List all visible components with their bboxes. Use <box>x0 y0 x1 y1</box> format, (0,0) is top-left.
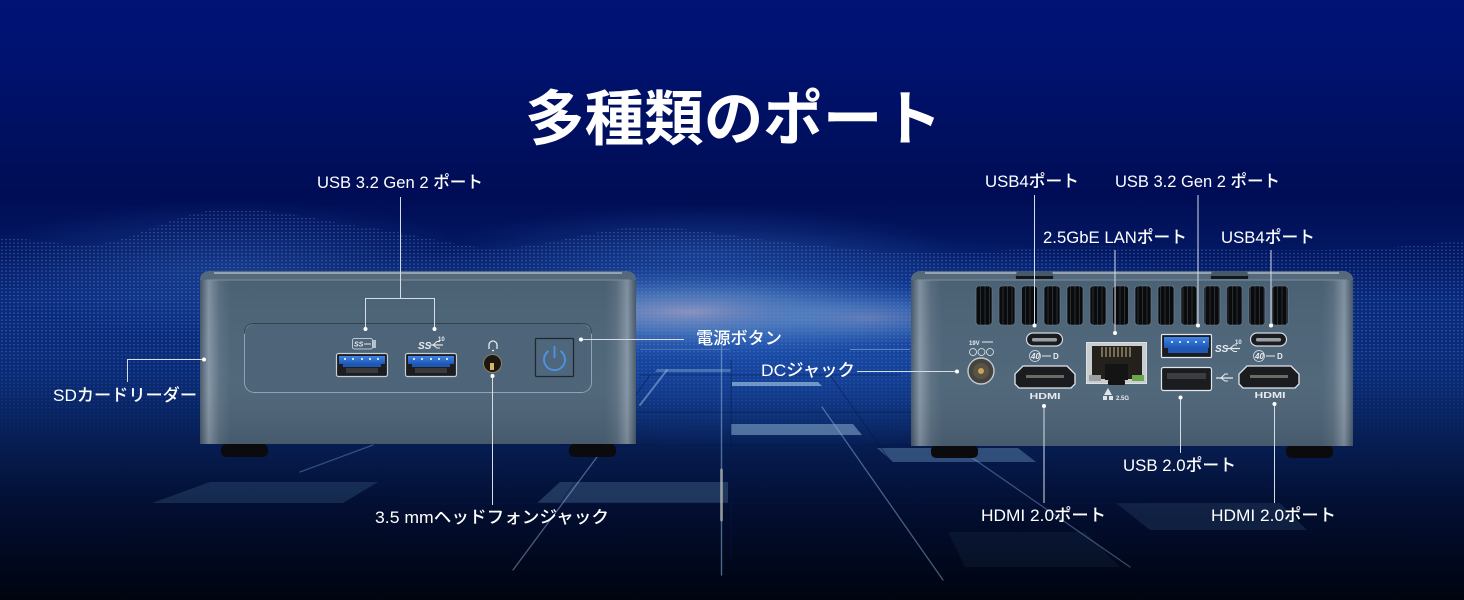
feet <box>221 444 616 457</box>
callout: HDMI right: HDMI 2.0ポート <box>1211 506 1336 525</box>
floor tiles <box>152 349 1307 567</box>
callout: DC jack: DCジャック <box>761 361 855 380</box>
port: LAN: 2.5G <box>1116 396 1129 402</box>
port: HDMI right: HDMI <box>1254 391 1286 400</box>
title: 多種類のポート <box>525 86 942 153</box>
port: USB-C left <box>1026 333 1062 362</box>
icon: SS battery <box>352 338 376 349</box>
port: USB-A 1 <box>336 354 388 376</box>
front panel <box>244 324 592 392</box>
callout: 2.5GbE LAN: 2.5GbE LANポート <box>1043 228 1187 247</box>
icon: SS 10: SS <box>418 341 432 352</box>
callout: USB4 right: USB4ポート <box>1221 228 1315 247</box>
port: USB 3 rear: 10 <box>1235 340 1242 346</box>
icon: SS battery: SS <box>354 342 364 348</box>
callout: front USB 3.2 Gen 2 <box>317 173 483 331</box>
light rays <box>300 345 1130 580</box>
device: rear view <box>911 271 1353 458</box>
port: DC jack: 19V <box>969 341 980 347</box>
port: HDMI left <box>1015 366 1075 401</box>
callout: USB4 left <box>985 172 1079 328</box>
callout: headphone jack: 3.5 mmヘッドフォンジャック <box>375 508 609 527</box>
callout: USB4 left: USB4ポート <box>985 172 1079 191</box>
feet <box>931 445 1333 458</box>
port: HDMI left: HDMI <box>1030 392 1060 401</box>
port: USB-C left: 40 <box>1030 352 1040 361</box>
port: USB-C left: D <box>1053 352 1059 361</box>
port: USB 3 rear <box>1162 334 1242 358</box>
callout: SD card reader <box>53 358 206 405</box>
callout: headphone jack <box>375 374 609 527</box>
port: USB 3 rear: SS <box>1215 344 1229 355</box>
port: USB-C right: 40 <box>1254 352 1264 361</box>
port: HDMI right <box>1239 366 1299 400</box>
port: USB-C right <box>1250 333 1286 362</box>
callout: SD card reader: SDカードリーダー <box>53 385 197 405</box>
power button <box>536 338 574 376</box>
callout: USB 2.0: USB 2.0ポート <box>1123 456 1236 475</box>
callout: USB4 right <box>1221 228 1315 328</box>
callout: power button: 電源ボタン <box>696 329 782 348</box>
front body <box>200 271 636 444</box>
rear body <box>911 271 1353 446</box>
port: DC jack <box>968 341 994 384</box>
callout: DC jack <box>761 361 959 380</box>
port: headphone jack <box>484 354 502 372</box>
icon: SS 10 <box>418 337 445 352</box>
port: LAN <box>1086 342 1146 402</box>
callout: rear USB 3.2 Gen 2: USB 3.2 Gen 2 ポート <box>1115 172 1280 191</box>
icon: headphone <box>489 341 497 350</box>
callout: HDMI left: HDMI 2.0ポート <box>981 506 1106 525</box>
callout: HDMI right <box>1211 402 1336 525</box>
callout: HDMI left <box>981 404 1106 525</box>
port: USB-C right: D <box>1277 352 1283 361</box>
vents <box>976 286 1288 325</box>
callout: USB 2.0 <box>1123 396 1236 475</box>
icon: SS 10: 10 <box>438 337 445 343</box>
port: USB-A 2 <box>406 354 456 376</box>
device: front view <box>200 271 636 457</box>
callout: front USB 3.2 Gen 2: USB 3.2 Gen 2 ポート <box>317 173 483 192</box>
callout: 2.5GbE LAN <box>1043 228 1187 335</box>
callout: power button <box>579 329 782 348</box>
callout: rear USB 3.2 Gen 2 <box>1115 172 1280 328</box>
port: USB 2 rear <box>1162 368 1233 390</box>
